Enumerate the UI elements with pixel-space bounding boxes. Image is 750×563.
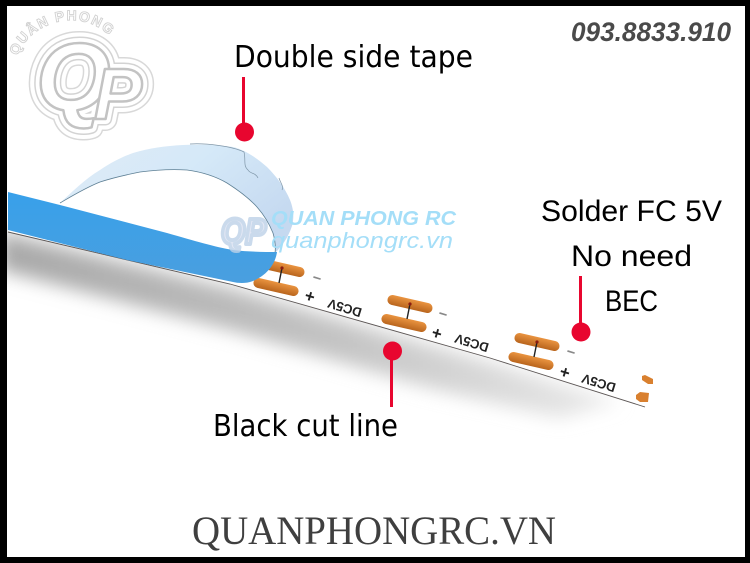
watermark: QP logo: P: [94, 55, 143, 135]
watermark: QP logo: QUÂN PHONG: [10, 10, 114, 54]
label: solder: No need: [571, 240, 692, 273]
label: solder: BEC: [605, 285, 658, 318]
watermark: QP logo: Q: [36, 24, 111, 131]
callout: tape marker: [235, 77, 254, 142]
strip markings: DC5V: [580, 371, 617, 395]
callout: solder marker: [572, 276, 590, 342]
callout: cut line marker: [383, 342, 402, 407]
double side tape arch: [8, 144, 293, 283]
watermark: QP logo: Q: [36, 24, 111, 131]
LED strip: [8, 190, 660, 407]
watermark: centre logo: QP: [221, 211, 267, 252]
blue tape band: [8, 192, 277, 283]
watermark: QP logo: Q: [36, 24, 111, 131]
strip markings: +: [429, 323, 444, 344]
strip markings: [302, 269, 617, 395]
phone number: 093.8833.910: [571, 17, 731, 47]
watermark: site name: QUAN PHONG RC: [271, 208, 457, 230]
strip markings: −: [436, 305, 450, 324]
strip markings: DC5V: [453, 331, 490, 355]
solder pads 3: [507, 332, 561, 371]
strip markings: −: [564, 343, 578, 362]
watermark: brand arc: [18, 20, 120, 56]
watermark: QP logo: Q: [36, 24, 111, 131]
label: solder: [541, 195, 722, 318]
strip markings: DC5V: [326, 296, 363, 320]
watermark: QP logo: Q: [36, 24, 111, 131]
watermark: QP logo: P: [94, 55, 143, 135]
solder pads 1: [252, 258, 306, 297]
solder pads 2: [380, 294, 434, 333]
watermark: QP logo: P: [94, 55, 143, 135]
label: double side tape: Double side tape: [234, 40, 473, 75]
label: solder: Solder FC 5V: [541, 195, 722, 228]
watermark: QP logo: P: [94, 55, 143, 135]
strip markings: +: [302, 286, 317, 307]
label: black cut line: Black cut line: [213, 409, 398, 444]
watermark: QP logo: [10, 10, 154, 140]
watermark: QP logo: P: [94, 55, 143, 135]
strip markings: +: [557, 362, 572, 383]
watermark: site name: quanphongrc.vn: [271, 228, 453, 253]
cut pads at strip end: [636, 375, 653, 402]
strip markings: −: [310, 269, 324, 288]
website footer: QUANPHONGRC.VN: [192, 508, 556, 553]
watermark: site name: [271, 208, 457, 253]
strip shadow: [0, 232, 620, 418]
